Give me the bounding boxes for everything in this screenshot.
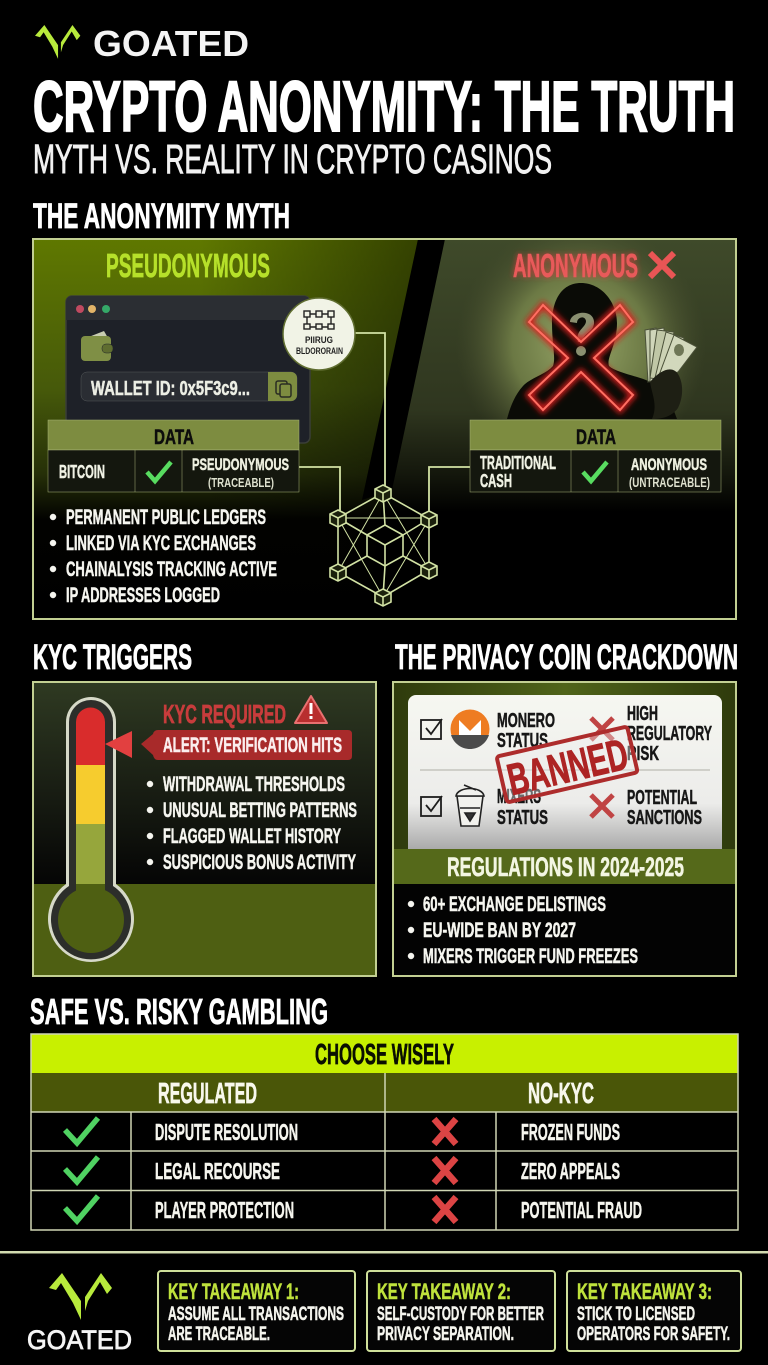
data table: bitcoin: BITCOIN [59,462,105,482]
data table: traditional cash: TRADITIONAL [480,453,556,473]
key takeaway 2: SELF-CUSTODY FOR BETTER [377,1304,544,1325]
key takeaway 1: ARE TRACEABLE. [168,1324,270,1345]
icon: goated logo [35,25,80,59]
status card: SANCTIONS [627,807,702,829]
blockchain badge: BLDORORAIN [296,346,343,357]
key takeaway 1 [158,1271,355,1351]
icon: wallet [81,331,113,361]
brand name: GOATED [27,1325,132,1355]
data table: traditional cash: DATA [576,426,616,449]
label: anonymous: ANONYMOUS [513,247,638,284]
key takeaway 2: KEY TAKEAWAY 2: [377,1279,511,1304]
table row text: DISPUTE RESOLUTION [155,1119,298,1145]
status card: HIGH [627,703,658,725]
column headers [31,1073,738,1112]
table row text [155,1119,642,1223]
label: pseudonymous: PSEUDONYMOUS [106,247,270,284]
heading: safe vs risky gambling: SAFE VS. RISKY GAMBLING [30,991,328,1032]
banned stamp [497,727,639,806]
status card: POTENTIAL [627,787,697,809]
thermometer [48,697,134,962]
wallet id field: WALLET ID: 0x5F3c9... [91,378,250,400]
brand name: GOATED [93,23,249,64]
panel: kyc triggers [33,682,376,976]
wallet id field [81,372,297,401]
key takeaway 2 [367,1271,555,1351]
key takeaway 2: PRIVACY SEPARATION. [377,1324,514,1345]
brand header [35,23,249,64]
key takeaway 1: ASSUME ALL TRANSACTIONS [168,1304,344,1325]
icon: check [147,462,171,481]
icon: monero logo [450,710,490,749]
status card: RISK [627,743,659,765]
label: anonymous: ANONYMOUS [513,247,638,284]
icon: hand holding cash [645,328,697,419]
table banner: CHOOSE WISELY [315,1039,454,1071]
bullet list: pseudonymous facts: IP ADDRESSES LOGGED [66,584,220,607]
icon: red crosses [591,718,613,817]
bullet list: pseudonymous facts [50,506,277,607]
status card: STATUS [497,807,548,829]
data table: bitcoin: PSEUDONYMOUS [192,455,289,474]
bullet list: regulations [408,893,638,968]
icon: warning triangle [295,696,327,723]
data table: traditional cash: CASH [480,471,512,491]
regulations banner [393,849,736,884]
table row text: LEGAL RECOURSE [155,1158,280,1184]
status card [408,695,722,849]
data table: traditional cash: ANONYMOUS [631,455,707,474]
status card: MONERO [497,710,555,732]
label: kyc required: KYC REQUIRED [163,699,286,729]
icon: red x [650,253,674,277]
callout: alert [141,730,352,760]
status card: STATUS [497,730,548,752]
heading: kyc triggers: KYC TRIGGERS [33,638,192,677]
connector lines [299,333,470,512]
key takeaway 3 [567,1271,741,1351]
footer [0,1251,768,1355]
icon: goated logo [49,1273,112,1320]
blockchain cube network [330,485,437,606]
bullet list: kyc triggers: SUSPICIOUS BONUS ACTIVITY [163,851,356,874]
bullet list: regulations: 60+ EXCHANGE DELISTINGS [423,893,606,916]
icons: check marks [65,1118,98,1221]
icon: red arrow [105,731,132,758]
icon: check [583,462,607,481]
data table: bitcoin [48,420,299,492]
bullet list: regulations: MIXERS TRIGGER FUND FREEZES [423,945,638,968]
wallet window [66,296,310,443]
status card: REGULATORY [627,723,712,745]
key takeaway 1: KEY TAKEAWAY 1: [168,1279,299,1304]
banned stamp: BANNED [503,730,633,805]
hooded figure with neon x [507,283,677,419]
panel: privacy coin crackdown [393,682,736,976]
bullet list: pseudonymous facts: CHAINALYSIS TRACKING ACTIVE [66,558,277,581]
column headers: NO-KYC [528,1078,594,1110]
heading: the anonymity myth: THE ANONYMITY MYTH [33,197,290,236]
data table: traditional cash: (UNTRACEABLE) [629,474,710,490]
bullet list: kyc triggers: WITHDRAWAL THRESHOLDS [163,773,345,796]
panel: the anonymity myth [33,239,736,619]
icons: red crosses [434,1119,456,1222]
table row text: PLAYER PROTECTION [155,1197,294,1223]
data table: bitcoin: DATA [154,426,194,449]
table row text: FROZEN FUNDS [521,1119,620,1145]
bullet list: pseudonymous facts: PERMANENT PUBLIC LEDGERS [66,506,266,529]
blockchain badge: PIIRUG [305,335,333,346]
status card: MIXERS [497,786,541,808]
data table: bitcoin: (TRACEABLE) [208,475,274,490]
bullet list: kyc triggers: FLAGGED WALLET HISTORY [163,825,341,848]
bullet list: pseudonymous facts: LINKED VIA KYC EXCHANGES [66,532,256,555]
bullet list: kyc triggers: UNUSUAL BETTING PATTERNS [163,799,357,822]
data table: traditional cash [470,420,721,492]
callout: alert: ALERT: VERIFICATION HITS [163,734,342,757]
table banner [31,1034,738,1073]
column headers: REGULATED [158,1078,257,1110]
blockchain badge [283,298,355,370]
table row text: POTENTIAL FRAUD [521,1197,642,1223]
table row text: ZERO APPEALS [521,1158,620,1184]
bullet list: kyc triggers [147,773,357,874]
comparison table [31,1034,738,1230]
key takeaway 3: STICK TO LICENSED [577,1304,695,1325]
icon: checkboxes [421,719,442,816]
icon: mixer cup [456,785,484,826]
bullet list: regulations: EU-WIDE BAN BY 2027 [423,919,576,942]
